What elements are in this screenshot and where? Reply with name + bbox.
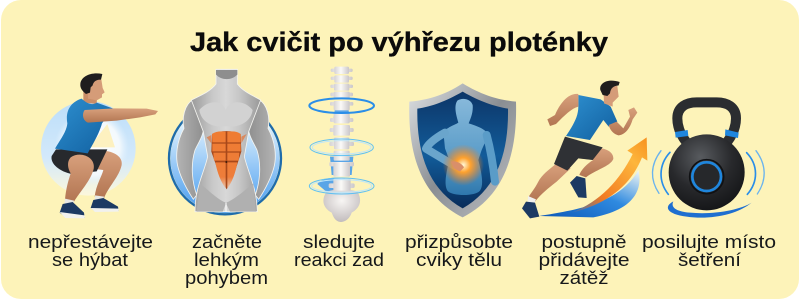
rising arrow	[539, 170, 640, 217]
label: přizpůsobte cviky tělu: cviky tělu	[416, 249, 502, 270]
label: postupně přidávejte zátěž: přidávejte	[538, 249, 630, 270]
label: začněte lehkým pohybem: začněte	[192, 231, 262, 252]
label: přizpůsobte cviky tělu: přizpůsobte	[405, 231, 513, 252]
label: postupně přidávejte zátěž	[538, 231, 630, 288]
icon: torso with highlighted abdominal muscles	[168, 69, 282, 217]
label: posilujte místo šetření: posilujte místo	[642, 231, 776, 252]
label: nepřestávejte se hýbat: nepřestávejte	[28, 231, 153, 252]
label: posilujte místo šetření	[642, 231, 776, 270]
blue bands	[675, 129, 739, 138]
label: začněte lehkým pohybem: pohybem	[185, 267, 268, 288]
label: postupně přidávejte zátěž: zátěž	[560, 267, 608, 288]
vertebrae stack	[329, 67, 355, 191]
rings	[309, 98, 374, 113]
pelvis	[323, 189, 360, 222]
label: začněte lehkým pohybem	[185, 231, 268, 288]
icon: kettlebell with vibration arcs	[652, 102, 764, 218]
label: sledujte reakci zad: reakci zad	[294, 249, 384, 270]
label: sledujte reakci zad	[294, 231, 384, 270]
label: přizpůsobte cviky tělu	[405, 231, 513, 270]
label: sledujte reakci zad: sledujte	[303, 231, 375, 252]
label: posilujte místo šetření: šetření	[678, 249, 742, 270]
kettlebell handle	[677, 102, 736, 142]
icon: shield with glowing lower back	[409, 83, 516, 217]
label: nepřestávejte se hýbat: se hýbat	[52, 249, 128, 270]
ground swoosh	[668, 201, 752, 218]
label: začněte lehkým pohybem: lehkým	[194, 249, 259, 270]
title: Jak cvičit po výhřezu ploténky	[190, 27, 608, 57]
icon: running man with rising arrow	[522, 81, 647, 218]
kettlebell body	[669, 134, 745, 210]
blue ring	[692, 162, 721, 191]
icon: spine with blue rings	[309, 67, 374, 222]
blue glow behind spine	[317, 108, 353, 192]
label: postupně přidávejte zátěž: postupně	[542, 231, 626, 252]
vibration arcs	[652, 151, 764, 194]
icon: man doing a squat	[41, 73, 158, 218]
label: nepřestávejte se hýbat	[28, 231, 153, 270]
